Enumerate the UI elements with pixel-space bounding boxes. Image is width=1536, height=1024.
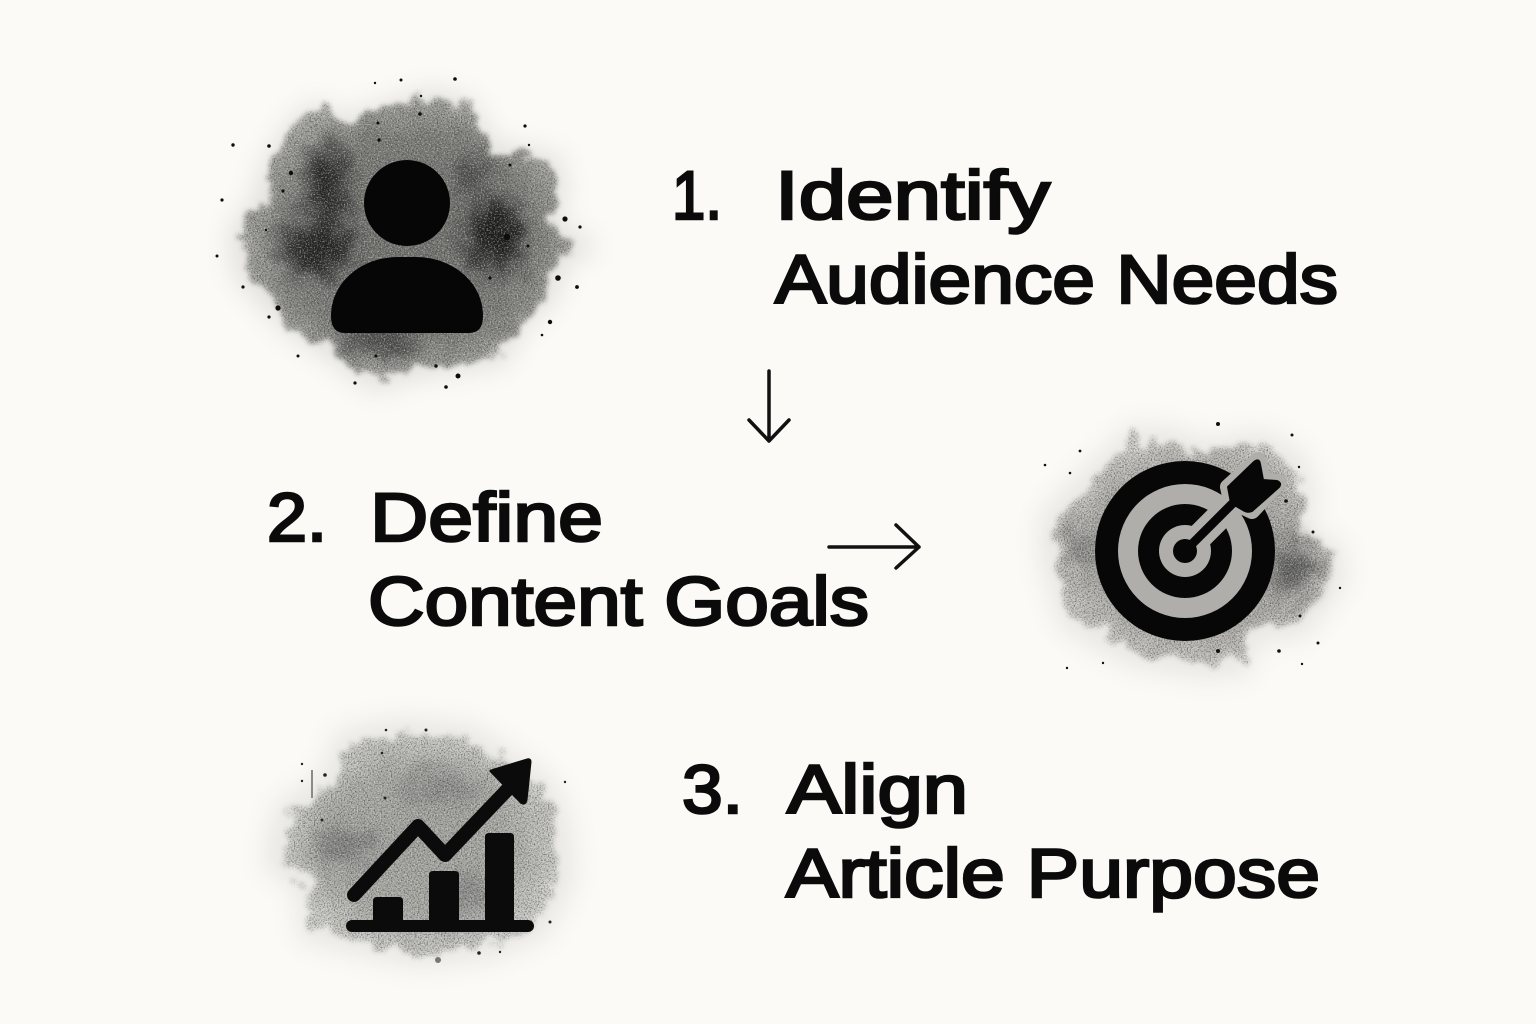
ink blot behind growth chart icon <box>262 718 575 968</box>
ink blot behind person icon <box>228 88 600 392</box>
step 1 number: 1. <box>672 157 722 234</box>
ink blot behind target icon <box>1040 425 1348 678</box>
icon: target with dart <box>1095 460 1280 641</box>
icon: growth chart with arrow <box>346 760 534 932</box>
step 3 number: 3. <box>682 751 743 828</box>
ink splatter dots <box>1044 422 1341 669</box>
stray ink mark and dots <box>301 728 566 963</box>
arrow: right to target icon <box>829 525 919 568</box>
icon: person <box>331 160 483 333</box>
step 1 heading: Identify <box>775 157 1051 234</box>
step 3 heading: Article Purpose <box>786 835 1320 912</box>
panel: step 1 identify audience needs <box>216 77 1338 392</box>
step 3 heading: Align <box>787 751 968 828</box>
step 2 heading: Define <box>370 479 603 556</box>
step 2 heading <box>368 479 869 640</box>
step 2 number: 2. <box>267 479 327 556</box>
step 3 heading <box>786 751 1320 912</box>
step 1 heading: Audience Needs <box>775 241 1338 318</box>
step 1 heading <box>775 157 1338 318</box>
arrow: down to step 2 <box>749 371 789 441</box>
ink splatter dots <box>216 77 582 389</box>
step 2 heading: Content Goals <box>368 563 869 640</box>
panel: step 2 define content goals <box>267 422 1348 678</box>
panel: step 3 align article purpose <box>262 718 1320 968</box>
